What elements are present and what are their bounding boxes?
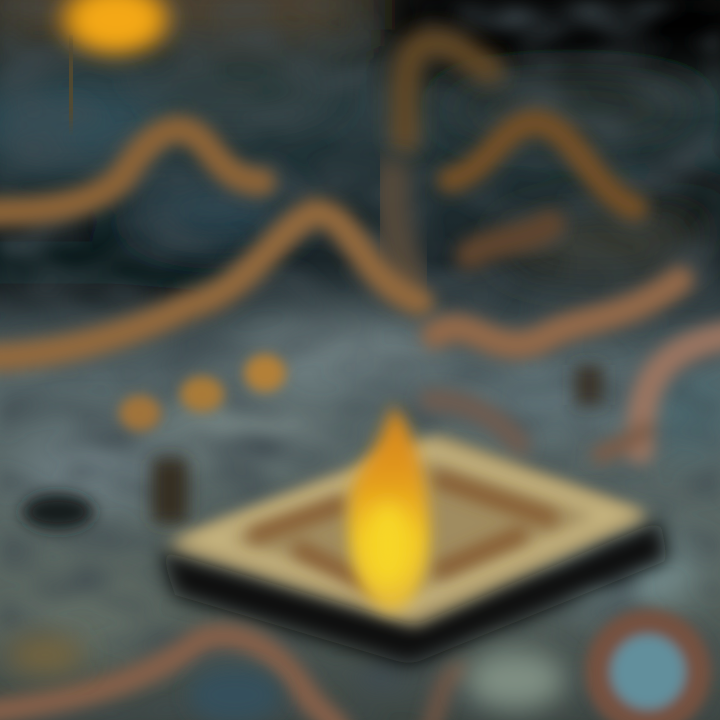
lower copper traces <box>0 636 460 720</box>
vertical faint trace <box>392 160 415 290</box>
plate inner light band <box>200 450 620 605</box>
sun glow <box>57 0 173 56</box>
small vertical trace under glow <box>70 60 72 110</box>
flame core highlight <box>364 503 412 587</box>
middle wavy line <box>0 212 420 358</box>
dark post and spots <box>22 365 603 530</box>
diamond plate <box>165 435 650 625</box>
plate inner trace <box>255 480 550 590</box>
top centre wavy line <box>405 42 490 140</box>
right pale patch <box>465 650 565 710</box>
upper left wavy line <box>0 129 262 212</box>
plate shadow <box>160 520 668 665</box>
right copper traces <box>430 225 720 455</box>
lower amber patch <box>5 635 85 675</box>
gold beads <box>119 354 286 431</box>
lower blue spot <box>189 667 281 720</box>
bottom right ring <box>598 622 698 720</box>
flame <box>349 405 429 612</box>
upper right wavy line <box>450 122 635 208</box>
